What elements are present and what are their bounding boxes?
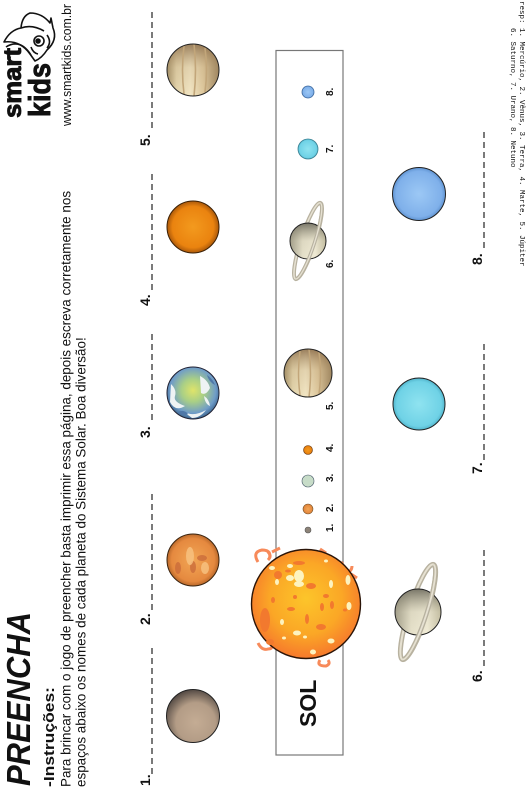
answer labels, top row: 3. xyxy=(137,426,153,438)
legend labels: 1. xyxy=(325,523,336,532)
answer labels, bottom row: 7. xyxy=(469,462,485,474)
planet 1: Mercury xyxy=(166,690,220,742)
sun spots xyxy=(269,560,352,654)
legend: small planets xyxy=(284,86,332,533)
sun xyxy=(252,548,360,666)
answer labels, top row: 5. xyxy=(137,134,153,146)
instructions text: espaços abaixo os nomes de cada planeta do Sistema Solar. Boa diversão! xyxy=(74,337,88,787)
logo: smart kids xyxy=(0,13,57,118)
legend labels: 6. xyxy=(325,259,336,268)
answer key xyxy=(508,1,525,267)
planet 2: Venus xyxy=(167,534,219,586)
planet 8: Neptune xyxy=(392,168,446,220)
legend labels: 4. xyxy=(325,443,336,452)
answer labels, top row: 4. xyxy=(137,294,153,306)
answer labels, top row: 2. xyxy=(137,613,153,625)
legend Jupiter xyxy=(284,349,332,397)
answer key: resp: 1. Mercúrio, 2. Vênus, 3. Terra, 4. Marte, 5. Júpiter xyxy=(517,1,525,267)
planet 5: Jupiter xyxy=(167,44,219,96)
legend labels: 2. xyxy=(325,503,336,512)
instructions text: Para brincar com o jogo de preencher basta imprimir essa página, depois escreva corretamente nos xyxy=(58,191,74,787)
sun sunspots xyxy=(260,561,347,645)
legend labels: 3. xyxy=(325,473,336,482)
planet 4: Mars xyxy=(167,201,219,253)
planet 7: Uranus xyxy=(393,378,445,430)
logo wordmark: kids xyxy=(22,63,57,117)
legend Saturn xyxy=(289,201,327,281)
answer lines, bottom row xyxy=(483,130,485,666)
instructions heading: -Instruções: xyxy=(41,687,58,787)
answer key: 6. Saturno, 7. Urano, 8. Netuno xyxy=(508,28,516,168)
sun flares xyxy=(256,548,357,666)
logo mascot xyxy=(4,13,55,61)
legend labels xyxy=(325,87,336,532)
planet 6: Saturn xyxy=(394,562,442,662)
answer labels, top row: 1. xyxy=(137,774,153,786)
instructions text xyxy=(58,191,88,787)
legend labels: 7. xyxy=(325,144,336,153)
logo wordmark xyxy=(0,47,57,118)
answer labels, top row xyxy=(137,134,153,786)
legend labels: 8. xyxy=(325,87,336,96)
answer labels, bottom row: 6. xyxy=(469,670,485,682)
website url: www.smartkids.com.br xyxy=(60,4,74,127)
answer lines, top row xyxy=(151,8,153,774)
answer labels, bottom row: 8. xyxy=(469,253,485,265)
legend labels: 5. xyxy=(325,401,336,410)
planet 3: Earth xyxy=(167,367,219,419)
sun label: SOL xyxy=(295,680,321,727)
legend box xyxy=(276,50,343,755)
title: PREENCHA xyxy=(0,612,37,786)
answer labels, bottom row xyxy=(469,253,485,682)
